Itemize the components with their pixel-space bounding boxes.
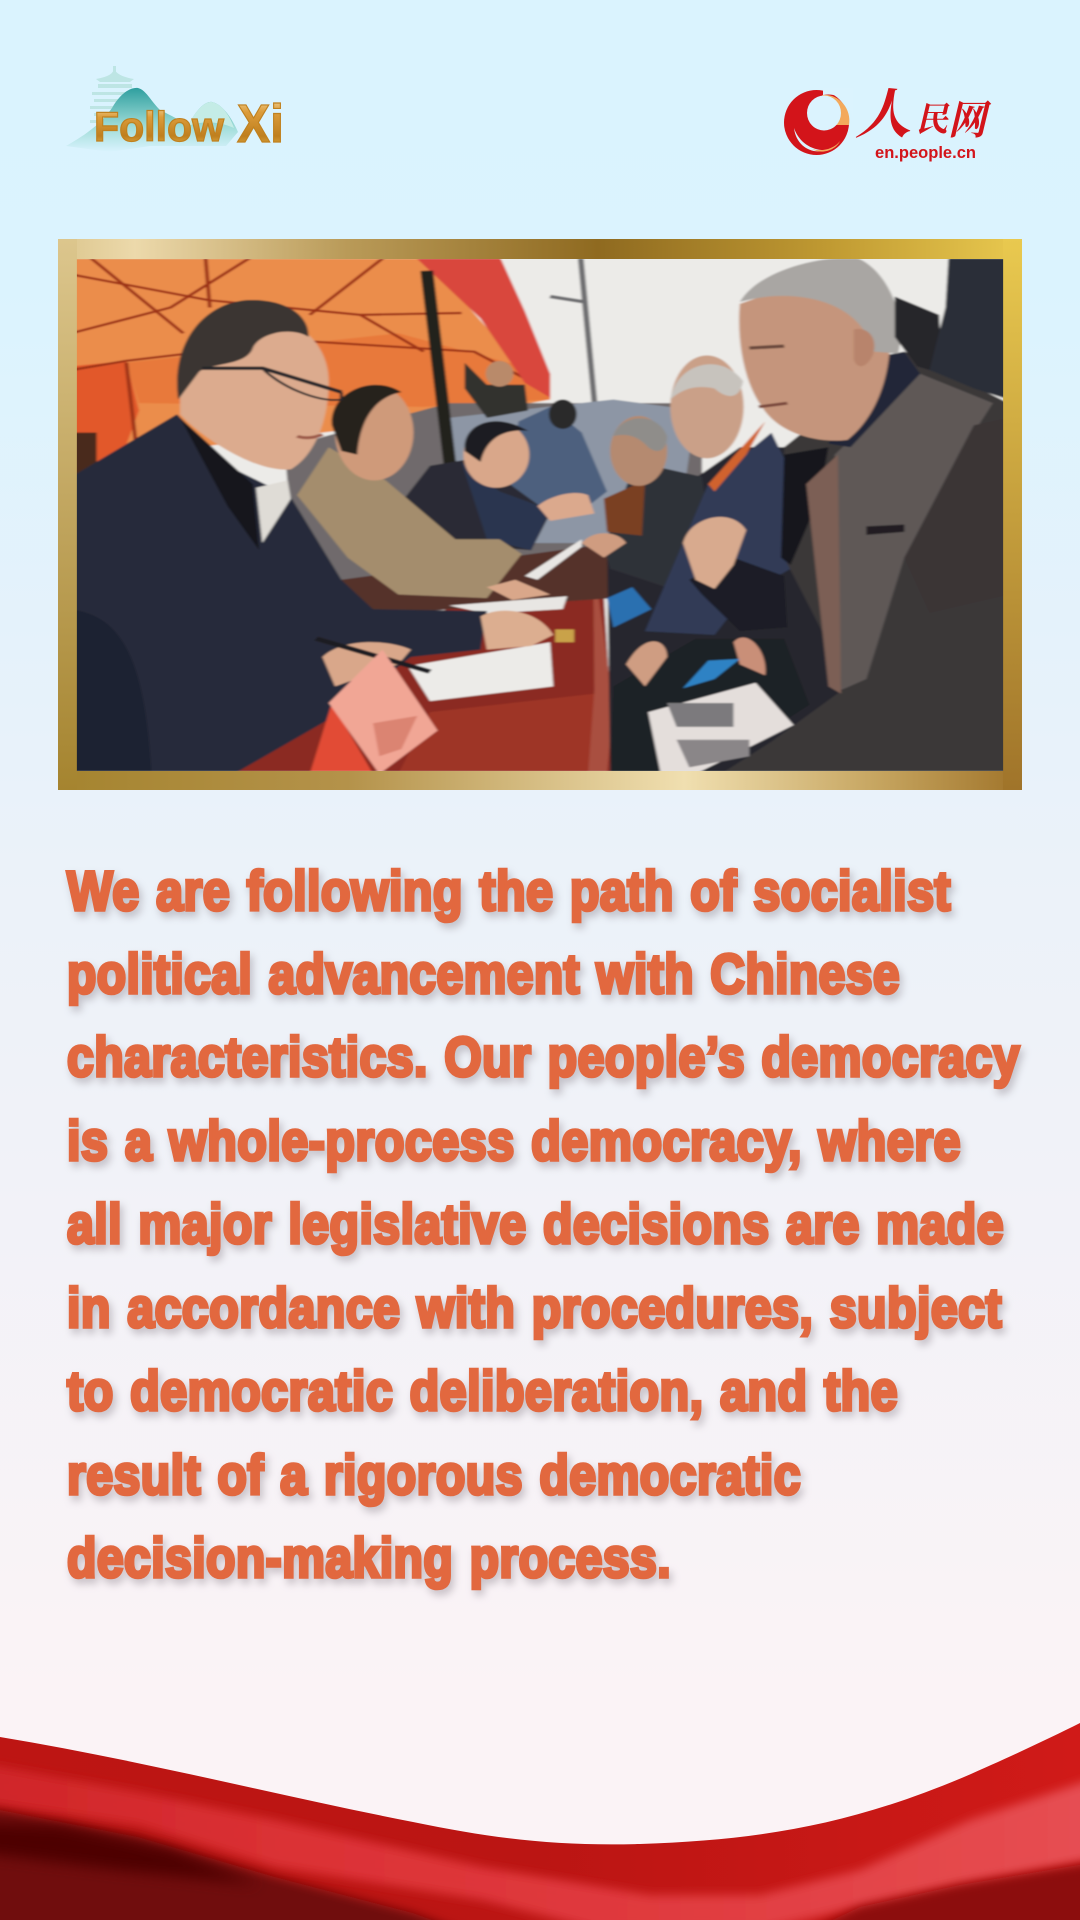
text block: quote: decision-making process.: [67, 1526, 671, 1589]
icon: red and orange swirl: [784, 88, 853, 155]
text block: quote: We are following the path of socialist: [67, 859, 951, 922]
logo text: 人民网: 人: [855, 85, 911, 145]
logo text: 人民网: 网: [948, 98, 992, 143]
official in front, navy jacket: [71, 300, 553, 774]
official in tan coat, second seat: [297, 385, 550, 600]
text block: quote: [67, 859, 1020, 1589]
logo text: en.people.cn: en.people.cn: [875, 144, 976, 162]
distant crowd: [284, 361, 702, 594]
logo: Follow Xi: [66, 66, 284, 154]
panel: gold framed photo: [58, 239, 1022, 790]
gold frame: [58, 239, 1022, 790]
binder clip: [555, 629, 574, 642]
resident in the middle: [626, 355, 797, 688]
logo wordmark: Xi: Xi: [237, 94, 284, 154]
logo text: 人民网: 民: [916, 102, 950, 139]
photo: officials meeting residents at a table: [71, 256, 1009, 774]
papers on the table: [408, 539, 582, 701]
logo text: 人民网: [855, 85, 992, 145]
people at top right: [895, 256, 1009, 399]
red banner: [414, 256, 550, 398]
pole: [419, 270, 458, 464]
text block: quote: to democratic deliberation, and the: [67, 1359, 898, 1422]
logo wordmark: Follow: Follow: [94, 103, 224, 150]
text block: quote: result of a rigorous democratic: [67, 1443, 801, 1506]
trousers, bag and background on resident side: [607, 447, 854, 774]
red ribbon footer: [0, 1723, 1080, 1920]
logo: People's Daily Online: [784, 85, 992, 162]
resident at the back: [582, 416, 708, 591]
table: [231, 543, 613, 774]
name plate: [310, 650, 438, 774]
text block: quote: is a whole-process democracy, where: [67, 1109, 961, 1172]
icon: pagoda and mountains: [66, 66, 238, 152]
official in navy, third seat: [398, 421, 594, 550]
street lamp: [548, 259, 599, 403]
tent canopy: [71, 256, 550, 477]
text block: quote: political advancement with Chinese: [67, 942, 900, 1005]
elderly resident in front: [648, 258, 1009, 774]
